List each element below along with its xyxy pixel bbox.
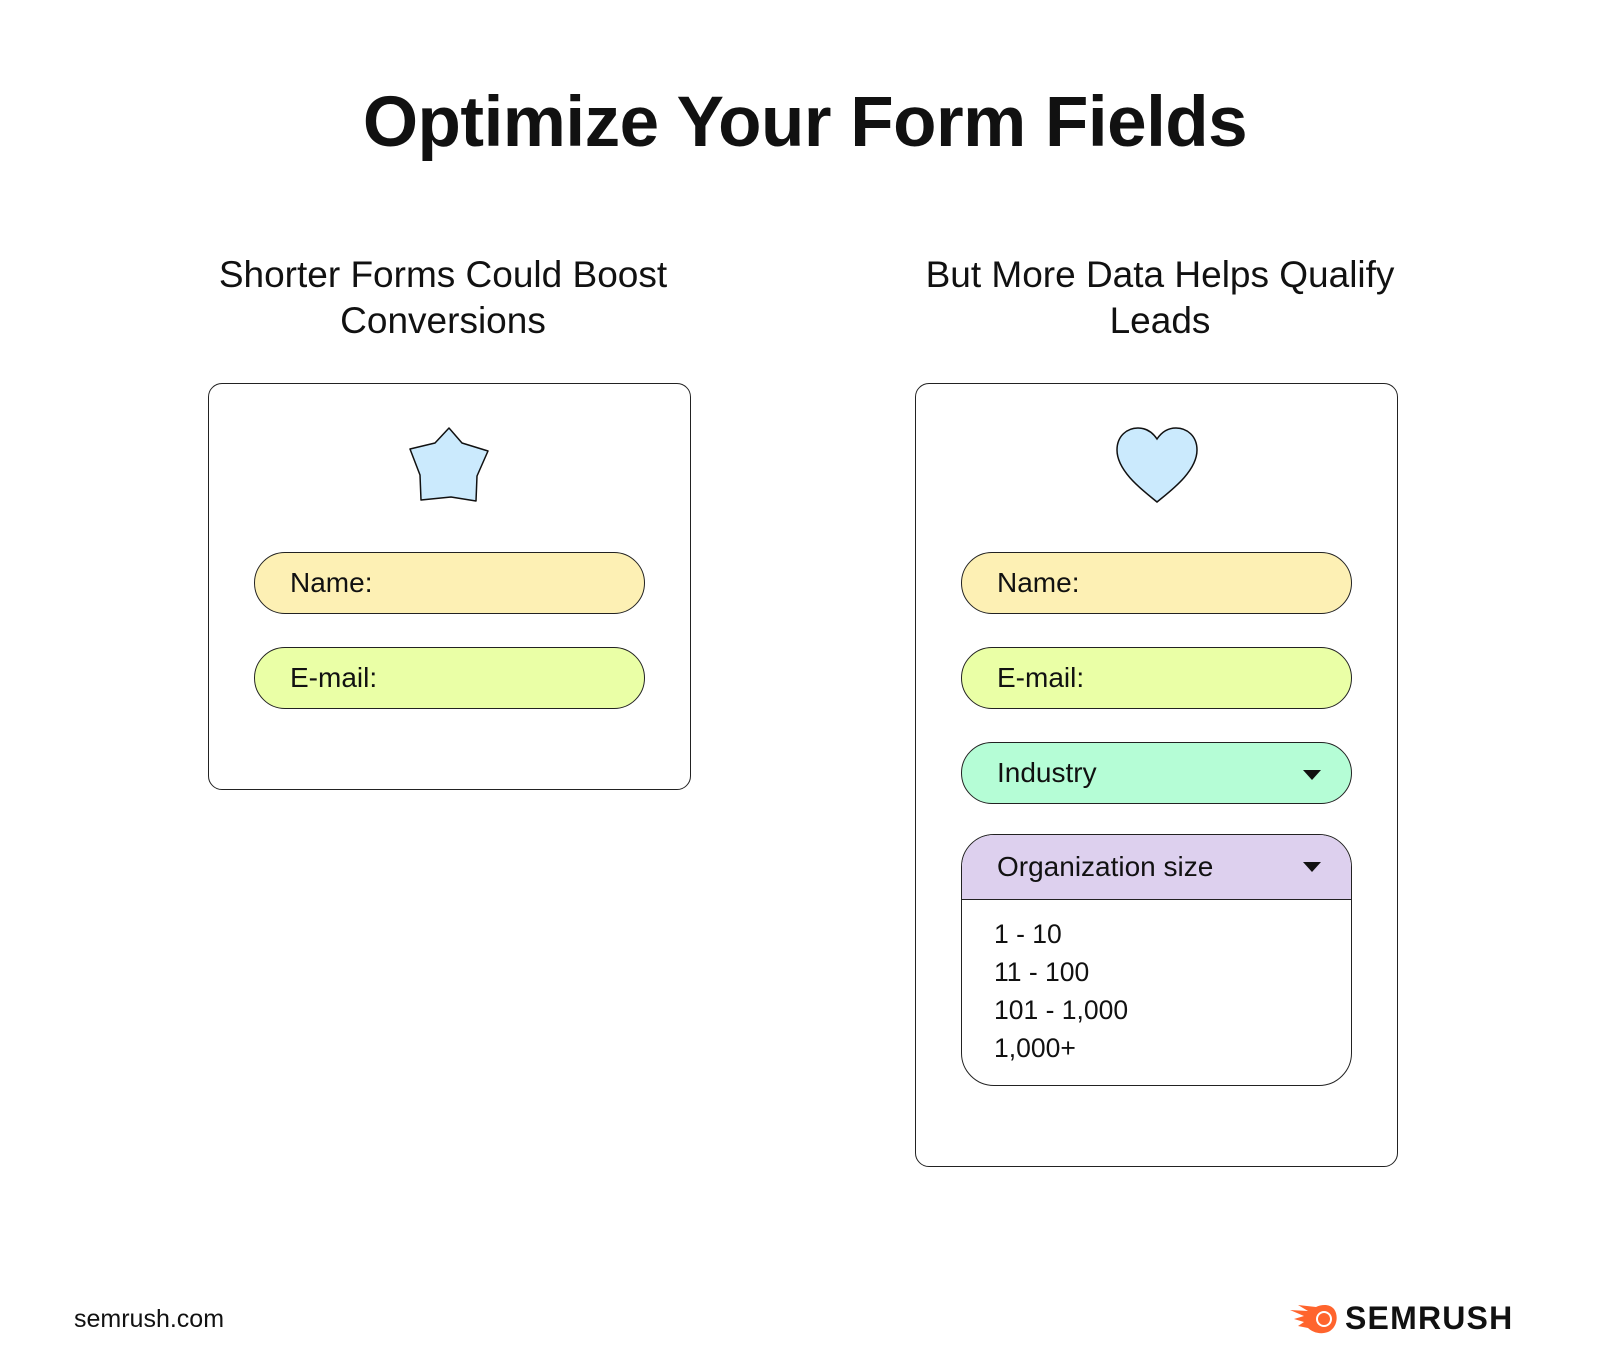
field: name: Name: xyxy=(290,567,372,598)
subheading: right: Leads xyxy=(1110,300,1210,341)
dropdown options: 1,000+ xyxy=(994,1033,1076,1063)
logo: semrush: SEMRUSH xyxy=(1345,1300,1513,1336)
dropdown header: Organization size xyxy=(997,851,1213,882)
field: email: E-mail: xyxy=(997,662,1084,693)
field: email xyxy=(254,647,645,709)
icon: heart xyxy=(1116,427,1198,503)
field: email: E-mail: xyxy=(290,662,377,693)
panel: short form xyxy=(208,383,691,790)
field: name: Name: xyxy=(997,567,1079,598)
field: email xyxy=(961,647,1352,709)
subheading: left: Conversions xyxy=(340,300,546,341)
dropdown options: 101 - 1,000 xyxy=(994,995,1128,1025)
title: Optimize Your Form Fields xyxy=(363,83,1247,162)
subheading: right xyxy=(926,254,1394,341)
field: name xyxy=(254,552,645,614)
field: organization size dropdown xyxy=(961,834,1352,1086)
field: industry dropdown: Industry xyxy=(997,757,1097,788)
subheading: left: Shorter Forms Could Boost xyxy=(219,254,667,295)
panel: long form xyxy=(915,383,1398,1167)
footer: source: semrush.com xyxy=(74,1305,224,1333)
icon: star xyxy=(409,427,489,502)
field: name xyxy=(961,552,1352,614)
dropdown options xyxy=(994,919,1128,1063)
field: industry dropdown xyxy=(961,742,1352,804)
dropdown options: 11 - 100 xyxy=(994,957,1089,987)
dropdown options: 1 - 10 xyxy=(994,919,1062,949)
subheading: left xyxy=(219,254,667,341)
dropdown header xyxy=(962,835,1351,900)
subheading: right: But More Data Helps Qualify xyxy=(926,254,1394,295)
